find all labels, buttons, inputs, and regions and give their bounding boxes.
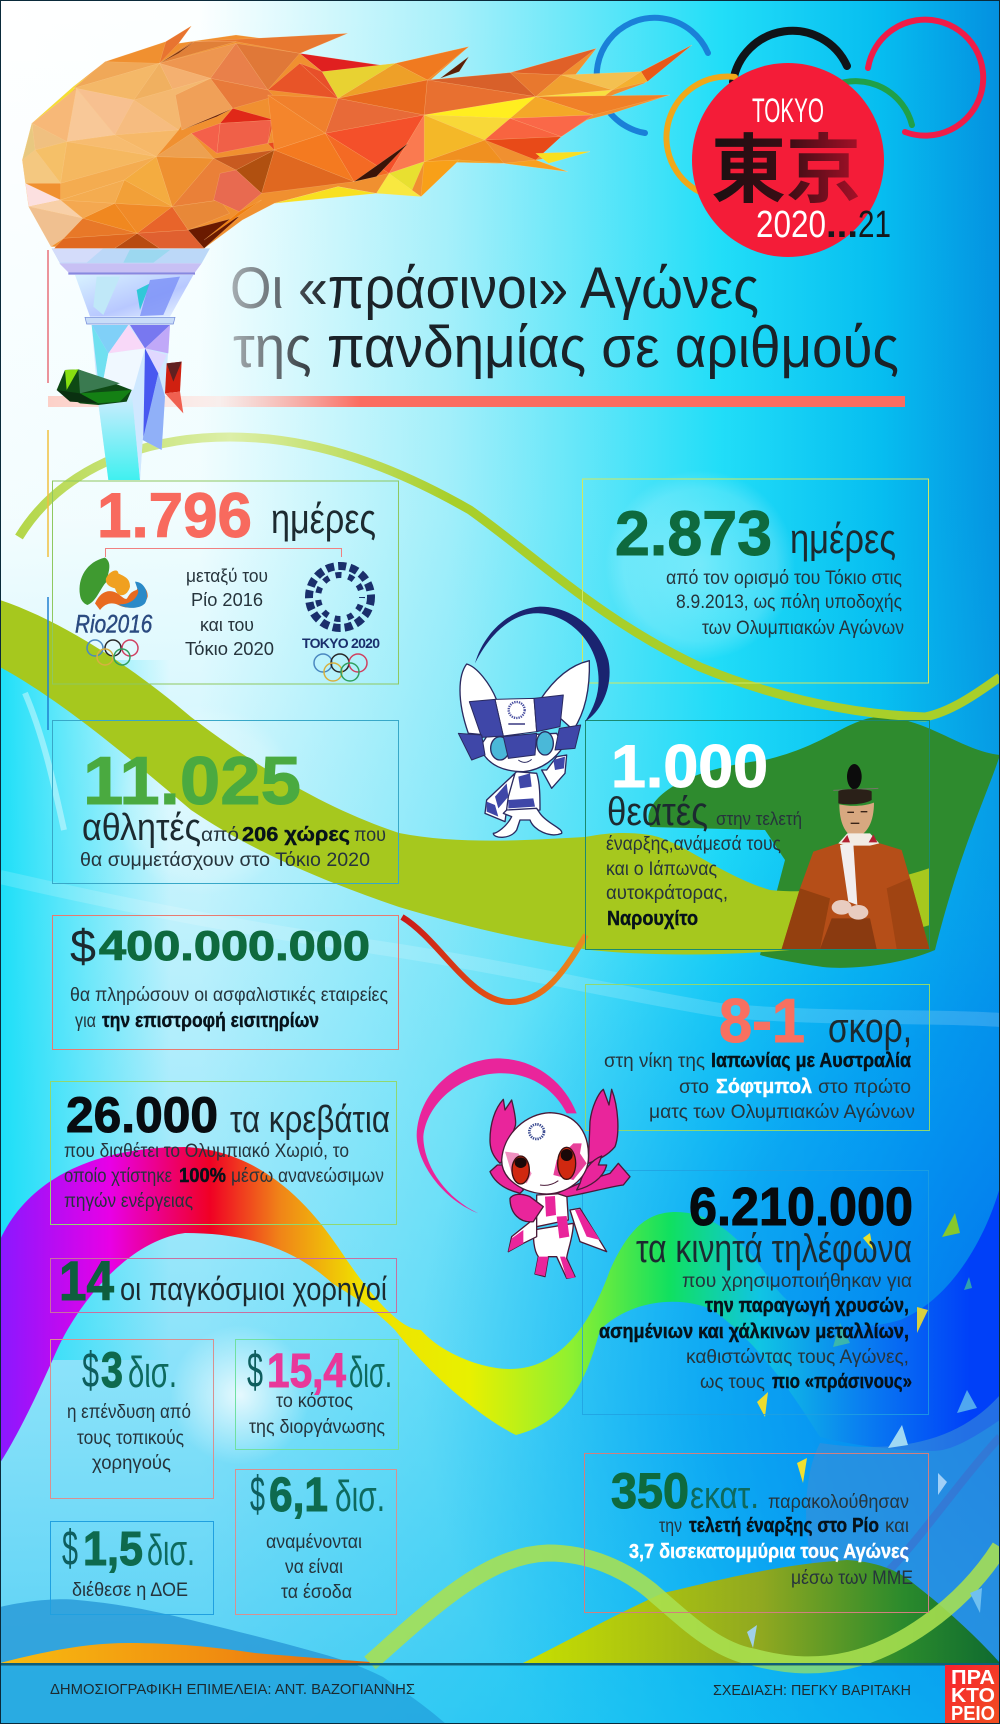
- ring: black: [733, 31, 847, 82]
- description: [599, 1271, 912, 1393]
- description: [70, 985, 388, 1032]
- panel: $6,1 bn: [236, 1466, 396, 1614]
- description: καθιστώντας τους Αγώνες,: [686, 1347, 909, 1368]
- text: between Rio and Tokyo: Ρίο 2016: [191, 590, 263, 610]
- description: 100%: [179, 1165, 226, 1187]
- title: [230, 256, 899, 380]
- description: να είναι: [285, 1557, 343, 1578]
- number: 26.000: 26.000: [66, 1087, 218, 1143]
- text: between Rio and Tokyo: [185, 566, 274, 659]
- description: [629, 1492, 913, 1589]
- panel: 14 sponsors: [50, 1249, 396, 1312]
- mascot: Miraitowa: [458, 607, 610, 837]
- title: Οι «πράσινοι» Αγώνες: [230, 256, 759, 321]
- panel: 350 million: [584, 1454, 928, 1612]
- number: $1,5 bn: [62, 1520, 195, 1576]
- description: [64, 1141, 384, 1212]
- ring: green: [835, 81, 912, 125]
- number: 350 million: 350: [611, 1463, 689, 1519]
- number: 1.000: 1.000: [611, 733, 768, 800]
- badge text: years: 2020: [756, 204, 826, 246]
- number: $15,4 bn: [247, 1342, 392, 1398]
- description: θεατές: [607, 790, 708, 834]
- label: athletes from 206 countries: που: [354, 825, 386, 846]
- badge text: years: [756, 204, 891, 246]
- photo: Emperor Naruhito: [782, 764, 929, 949]
- description: στο πρώτο: [818, 1077, 911, 1098]
- number: $15,4 bn: δισ.: [349, 1348, 392, 1397]
- icon: Tokyo 2020 emblem: [302, 566, 380, 681]
- description: τα έσοδα: [281, 1582, 352, 1603]
- description: στη νίκη της: [604, 1051, 705, 1072]
- label: athletes from 206 countries: αθλητές: [82, 807, 201, 849]
- logo: Praktoreio: ΚΤΟ: [951, 1685, 995, 1707]
- number: $400.000.000: 400.000.000: [99, 922, 370, 969]
- panel: $400.000.000: [52, 916, 398, 1050]
- ring: blue: [597, 18, 708, 133]
- title: της πανδημίας σε αριθμούς: [233, 315, 899, 380]
- number: $6,1 bn: [250, 1466, 385, 1522]
- number: $3 bn: $: [82, 1342, 99, 1398]
- number: 11.025: 11.025: [83, 743, 301, 819]
- description: στο: [679, 1077, 709, 1098]
- number: $6,1 bn: 6,1: [269, 1469, 328, 1522]
- badge text: TOKYO: TOKYO: [752, 92, 824, 130]
- label: athletes from 206 countries: θα συμμετάσχουν στο Τόκιο 2020: [80, 850, 370, 871]
- badge: Tokyo 2020...21: [692, 63, 891, 257]
- number: $15,4 bn: 15,4: [267, 1345, 346, 1398]
- description: και: [885, 1516, 909, 1537]
- description: για: [75, 1011, 96, 1032]
- number: $1,5 bn: $: [62, 1520, 78, 1576]
- torch: [52, 248, 210, 480]
- connector bracket: [106, 548, 342, 557]
- description: έναρξης,ανάμεσά τους: [606, 834, 781, 855]
- icon: Rio 2016 logo: [75, 558, 153, 665]
- panel: $15,4 bn: [236, 1340, 398, 1450]
- description: μέσω ανανεώσιμων: [231, 1166, 384, 1187]
- description: [249, 1391, 385, 1438]
- description: παρακολούθησαν: [768, 1492, 909, 1513]
- description: τους τοπικούς: [77, 1428, 184, 1449]
- label: days: ημέρες: [271, 495, 376, 542]
- badge text: years: ...: [826, 204, 858, 246]
- number: $3 bn: [82, 1342, 177, 1398]
- label: days: ημέρες: [790, 515, 896, 562]
- number: 2.873: 2.873: [615, 499, 772, 569]
- description: το κόστος: [276, 1391, 353, 1412]
- number: $1,5 bn: δισ.: [147, 1526, 195, 1575]
- description: [666, 568, 904, 639]
- number: $6,1 bn: δισ.: [335, 1472, 385, 1521]
- description: Ιαπωνίας με Αυστραλία: [711, 1050, 912, 1072]
- description: πιο «πράσινους»: [772, 1371, 912, 1393]
- panel: 11.025 athletes: [52, 720, 398, 884]
- decorative left vertical lines: [47, 250, 49, 730]
- flame: [22, 26, 692, 248]
- icon: red gem: [165, 362, 183, 413]
- description: από τον ορισμό του Τόκιο στις: [666, 568, 902, 589]
- red sun: [692, 63, 884, 257]
- label: sponsors: οι παγκόσμιοι χορηγοί: [120, 1271, 387, 1307]
- text: between Rio and Tokyo: μεταξύ του: [186, 566, 268, 586]
- description: ασημένιων και χάλκινων μεταλλίων,: [599, 1321, 909, 1343]
- description: ως τους: [700, 1372, 765, 1393]
- number: $15,4 bn: $: [247, 1342, 263, 1398]
- description: οποίο χτίστηκε: [64, 1166, 172, 1187]
- description: και ο Ιάπωνας: [606, 859, 717, 880]
- description: [606, 790, 802, 930]
- number: $1,5 bn: 1,5: [83, 1523, 143, 1576]
- description: [604, 1050, 915, 1123]
- description: μέσω των ΜΜΕ: [791, 1568, 913, 1589]
- description: Ναρουχίτο: [607, 908, 698, 930]
- icon: Rio 2016 logo: Rio2016: [75, 610, 153, 638]
- panel: 1.796 days: [52, 481, 398, 684]
- panel: 6.210.000 phones: [582, 1170, 928, 1414]
- credit: editor: ΔΗΜΟΣΙΟΓΡΑΦΙΚΗ ΕΠΙΜΕΛΕΙΑ: ΑΝΤ. ΒΑΖΟΓΙΑΝΝΗΣ: [50, 1681, 415, 1698]
- panel: 26.000 beds: [50, 1082, 396, 1224]
- footer: [0, 1663, 1000, 1724]
- description: 8.9.2013, ως πόλη υποδοχής: [676, 592, 902, 613]
- number: $3 bn: δισ.: [128, 1348, 177, 1397]
- text: between Rio and Tokyo: Τόκιο 2020: [185, 639, 274, 659]
- number: $6,1 bn: $: [250, 1466, 265, 1522]
- number: $400.000.000: $: [70, 920, 96, 972]
- logo: Praktoreio: ΠΡΑ: [951, 1667, 995, 1689]
- description: θα πληρώσουν οι ασφαλιστικές εταιρείες: [70, 985, 388, 1006]
- label: mobile phones: τα κινητά τηλέφωνα: [636, 1227, 912, 1271]
- description: Σόφτμπολ: [716, 1076, 812, 1098]
- description: στην τελετή: [716, 809, 802, 829]
- description: 3,7 δισεκατομμύρια τους Αγώνες: [629, 1541, 909, 1563]
- number: 14: 14: [59, 1249, 114, 1312]
- description: αυτοκράτορας,: [606, 883, 728, 904]
- description: την παραγωγή χρυσών,: [705, 1295, 909, 1317]
- description: την: [659, 1516, 682, 1537]
- label: athletes from 206 countries: 206 χώρες: [242, 824, 350, 846]
- badge kanji: 東京: [711, 128, 861, 212]
- logo: Praktoreio: [945, 1665, 1000, 1724]
- label: beds: τα κρεβάτια: [230, 1099, 390, 1141]
- description: των Ολυμπιακών Αγώνων: [702, 618, 904, 639]
- label: athletes from 206 countries: [80, 807, 386, 871]
- description: η επένδυση από: [67, 1402, 191, 1423]
- Olympic brush rings: [597, 18, 983, 192]
- badge text: years: 21: [858, 204, 891, 246]
- number: 350 million: [611, 1463, 759, 1519]
- description: αναμένονται: [266, 1532, 362, 1553]
- icon: green gem: [57, 369, 132, 405]
- text: between Rio and Tokyo: και του: [200, 615, 254, 635]
- ring: yellow: [666, 77, 735, 192]
- description: την επιστροφή εισιτηρίων: [102, 1010, 319, 1032]
- mascot: Someity: [417, 1058, 630, 1278]
- number: 350 million: εκατ.: [690, 1475, 759, 1517]
- ring: red: [868, 20, 983, 136]
- panel: $1,5 bn: [50, 1520, 214, 1614]
- description: πηγών ενέργειας: [64, 1191, 193, 1212]
- credit: design: ΣΧΕΔΙΑΣΗ: ΠΕΓΚΥ ΒΑΡΙΤΑΚΗ: [713, 1682, 911, 1699]
- description: διέθεσε η ΔΟΕ: [72, 1580, 188, 1601]
- panel: 2.873 days: [582, 479, 928, 683]
- number: 8-1: 8-1: [719, 987, 805, 1056]
- description: χορηγούς: [92, 1453, 171, 1474]
- icon: Tokyo 2020 emblem: TOKYO 2020: [302, 635, 380, 651]
- label: score: σκορ,: [828, 1004, 912, 1051]
- description: που διαθέτει το Ολυμπιακό Χωριό, το: [64, 1141, 349, 1162]
- description: ματς των Ολυμπιακών Αγώνων: [649, 1102, 915, 1123]
- number: 1.796: 1.796: [97, 481, 252, 551]
- panel: 1.000 spectators: [586, 720, 930, 950]
- panel: $3 bn: [50, 1340, 214, 1498]
- label: athletes from 206 countries: από: [201, 825, 239, 846]
- title underline bar: [48, 396, 905, 407]
- description: που χρησιμοποιήθηκαν για: [682, 1271, 912, 1292]
- description: [67, 1402, 191, 1474]
- description: τελετή έναρξης στο Ρίο: [689, 1515, 879, 1537]
- description: [266, 1532, 362, 1603]
- number: 6.210.000: 6.210.000: [689, 1177, 913, 1237]
- panel: 8-1 score: [586, 984, 930, 1130]
- description: της διοργάνωσης: [249, 1417, 385, 1438]
- number: $3 bn: 3: [101, 1342, 123, 1398]
